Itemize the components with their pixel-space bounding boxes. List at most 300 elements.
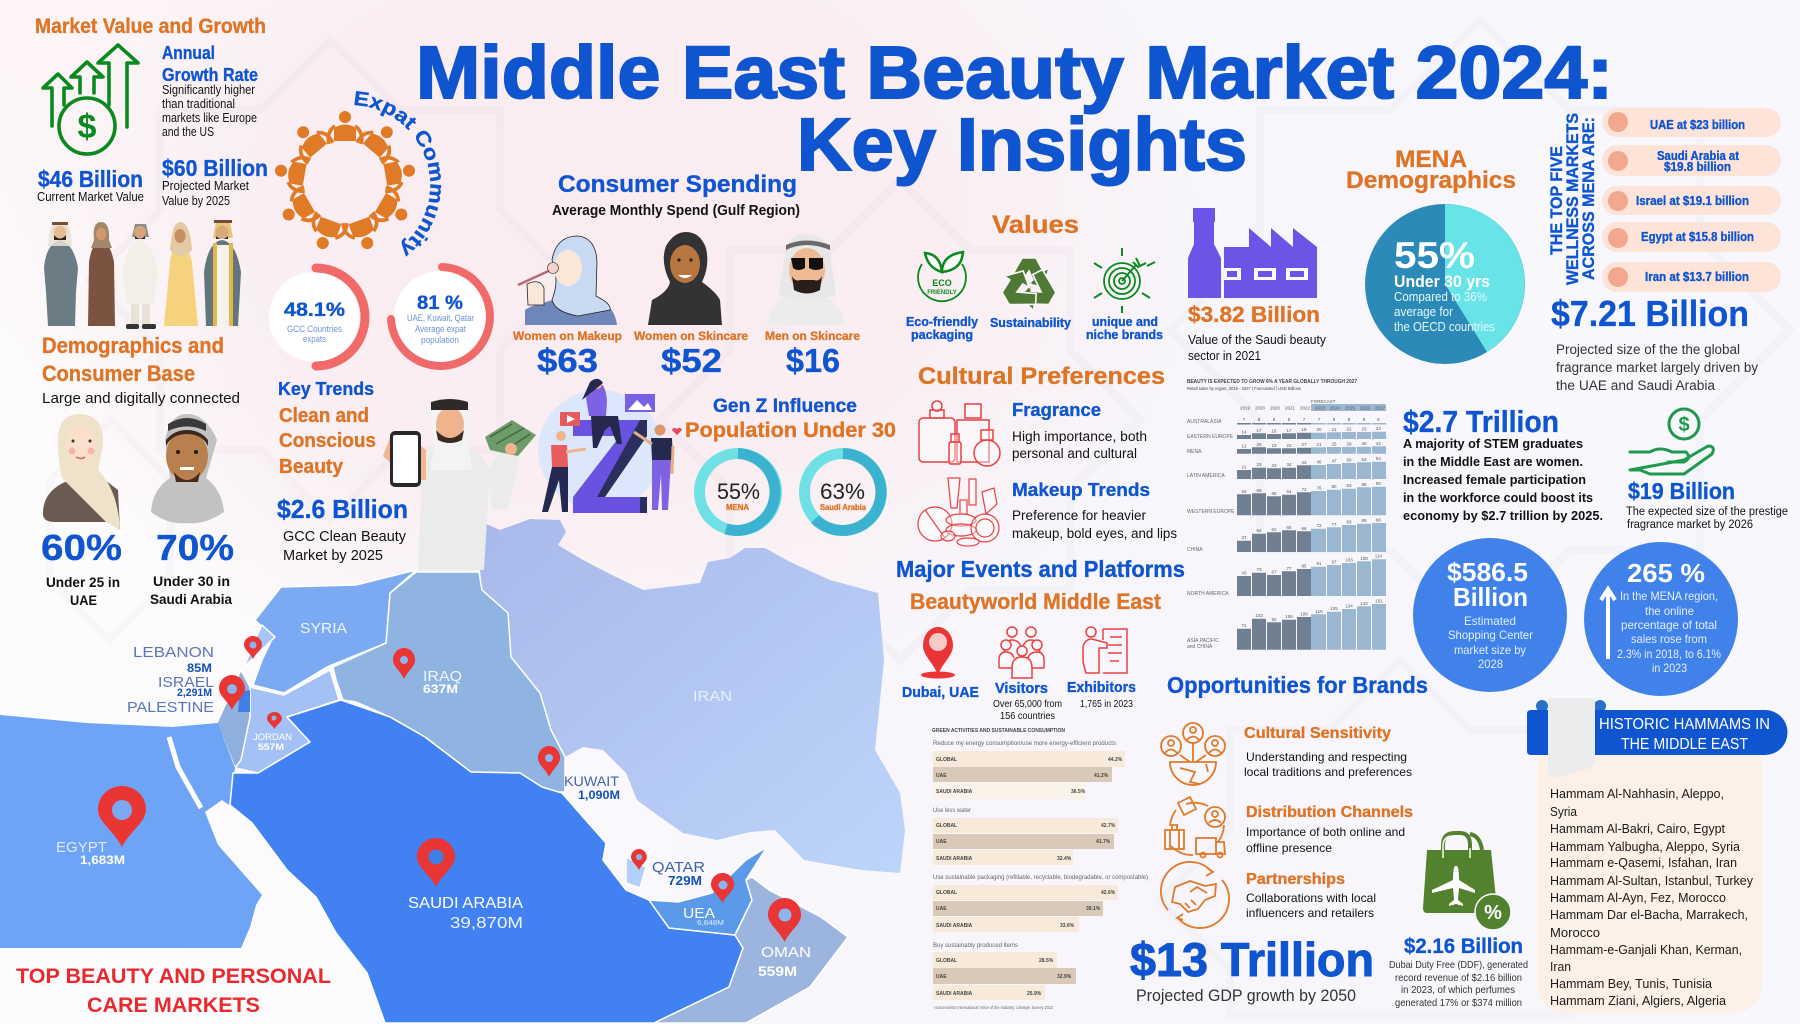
bar values: 77 [1331, 522, 1337, 527]
region labels: LATIN AMERICA [1187, 473, 1225, 479]
stat: projected market value [162, 155, 268, 208]
bar values: 29 [1346, 442, 1352, 446]
icon: duty free shopping bag: % [1484, 902, 1502, 924]
stat: $2.7 trillion STEM: A majority of STEM graduates [1403, 437, 1583, 451]
text: annual growth rate: Annual [162, 43, 215, 63]
country: Egypt [0, 715, 262, 948]
stat: 60% under 25 in UAE [41, 527, 122, 608]
text: distribution channels [1246, 804, 1413, 855]
bar values: 45 [1316, 460, 1322, 464]
bar labels: UAE [936, 773, 947, 779]
stat: Saudi beauty sector [1188, 302, 1327, 363]
circle: shopping center market: Billion [1453, 582, 1528, 612]
pill: Israel: Israel at $19.1 billion [1636, 194, 1749, 208]
title: Middle East Beauty Market 2024: [416, 31, 1613, 114]
bar values: 103 [1345, 558, 1353, 562]
bar values: 116 [1315, 609, 1323, 614]
illustration: woman in black hijab [648, 232, 722, 325]
map labels: 6,848M [697, 920, 724, 927]
region labels: ASIA PACIFIC [1187, 638, 1219, 644]
country: Israel and Palestine [217, 670, 250, 768]
circle: shopping center market: Shopping Center [1448, 628, 1533, 642]
text: annual growth rate: than traditional [162, 97, 235, 111]
country: Iran [477, 519, 905, 873]
stat: women on makeup $63: Women on Makeup [513, 329, 622, 343]
text: event facts: 1,765 in 2023 [1080, 698, 1133, 710]
country: UAE [649, 847, 767, 935]
bar values: 134 [1345, 604, 1353, 608]
circle: online sales 265%: percentage of total [1621, 618, 1717, 632]
icon: hand holding dollar coin: $ [1678, 414, 1690, 436]
bar labels: GLOBAL [936, 823, 957, 829]
bar values: 37 [1241, 535, 1247, 540]
stat: GCC clean beauty market [277, 494, 408, 564]
icon: recycling [996, 258, 1062, 316]
text: event facts: Visitors [995, 680, 1048, 697]
pill: Iran [1602, 262, 1781, 292]
list of hammams: Hammam Bey, Tunis, Tunisia [1550, 976, 1713, 991]
stat: $2.7 trillion STEM: in the Middle East are women. [1403, 455, 1583, 469]
bar labels: GLOBAL [936, 890, 957, 896]
stat: women on makeup $63 [513, 329, 622, 379]
bar values: 21 [1331, 427, 1337, 432]
heading: consumer spending: Average Monthly Spend (Gulf Region) [552, 203, 800, 219]
bar values: 21 [1316, 442, 1322, 447]
pill: Saudi Arabia: $19.8 billion [1664, 160, 1731, 174]
forecast header band: 2020 [1255, 406, 1266, 410]
stat: projected market value: $60 Billion [162, 155, 268, 181]
text: event facts [902, 679, 1136, 722]
text: fragrance [1012, 400, 1147, 461]
map labels: LEBANON [133, 644, 214, 661]
stat: current market value: Current Market Value [37, 190, 144, 204]
list of hammams: Hammam Al-Ayn, Fez, Morocco [1550, 890, 1726, 905]
map labels: UEA [683, 905, 715, 922]
chart title: GREEN ACTIVITIES AND SUSTAINABLE CONSUMPTION [932, 728, 1065, 734]
stat: $2.7 trillion STEM: economy by $2.7 trillion by 2025. [1403, 509, 1603, 523]
forecast header band: 2026 [1360, 406, 1371, 410]
stat: $13 trillion GDP growth: Projected GDP growth by 2050 [1136, 986, 1356, 1005]
text: partnerships: Partnerships [1246, 871, 1345, 888]
bar values: 109 [1300, 612, 1308, 616]
illustration: woman applying makeup [518, 236, 617, 325]
bar values: 33 [1271, 463, 1277, 468]
country: Syria [253, 570, 416, 693]
bar values: 89 [1361, 518, 1367, 523]
stat: current market value: $46 Billion [38, 166, 143, 192]
stat: 60% under 25 in UAE: Under 25 in [46, 575, 120, 590]
bar values: 63 [1241, 489, 1247, 494]
bar labels: 42.6% [1101, 890, 1116, 896]
bar values: 33 [1256, 462, 1262, 467]
group captions: Use less water [933, 808, 971, 814]
bar values: 8 [1333, 417, 1336, 422]
stat: men on skincare $16: Men on Skincare [765, 329, 860, 343]
pie chart: 55% under 30 [1365, 204, 1525, 364]
circle: shopping center market: market size by [1454, 643, 1526, 657]
bar labels: 39.1% [1086, 906, 1101, 912]
heading: key trends: Clean and [279, 405, 369, 427]
text: fragrance: High importance, both [1012, 429, 1147, 444]
icon: cultural sensitivity [1161, 723, 1225, 785]
bar values: 96 [1376, 518, 1381, 522]
text: makeup trends: makeup, bold eyes, and lips [1012, 526, 1177, 541]
text: annual growth rate [162, 43, 258, 139]
text: annual growth rate: Growth Rate [162, 65, 258, 85]
text: partnerships: Collaborations with local [1246, 891, 1376, 905]
pie chart: 55% under 30: average for [1394, 305, 1453, 319]
stat: $2.7 trillion STEM [1403, 404, 1603, 523]
text: annual growth rate: Significantly higher [162, 83, 255, 97]
region labels: and CHINA [1187, 644, 1213, 650]
pill: Egypt: Egypt at $15.8 billion [1641, 230, 1754, 244]
bar values: 17 [1256, 428, 1262, 433]
bar labels: SAUDI ARABIA [936, 923, 973, 929]
text: cultural sensitivity: local traditions and preferences [1244, 765, 1412, 779]
map labels: 85M [187, 661, 212, 675]
stat: prestige fragrance market: The expected size of the prestige [1626, 506, 1788, 518]
bar values: 90 [1376, 481, 1381, 486]
bar values: 65 [1271, 491, 1277, 496]
pill: UAE [1602, 108, 1781, 137]
forecast bars [1311, 423, 1386, 650]
stat: global fragrance market: the UAE and Saudi Arabia [1556, 378, 1715, 393]
bar values: 47 [1331, 458, 1337, 464]
heading: key trends: Key Trends [278, 379, 374, 399]
rotated heading: top five wellness markets: WELLNESS MARKETS [1564, 113, 1582, 285]
map labels: QATAR [652, 859, 705, 876]
forecast header band: 2027 [1375, 406, 1386, 410]
heading: Gen Z influence: Gen Z Influence [713, 396, 857, 417]
region labels: WESTERN EUROPE [1187, 509, 1235, 515]
list of hammams: Hammam Dar el-Bacha, Marrakech, [1550, 907, 1748, 922]
forecast header band: 2023 [1315, 406, 1326, 410]
heading: opportunities for brands: Opportunities for Brands [1167, 672, 1428, 698]
stat: 70% under 30 in Saudi Arabia: Saudi Arabia [150, 592, 232, 607]
donut: 81% UAE Kuwait Qatar expat population: population [421, 335, 459, 345]
stat: men on skincare $16: $16 [786, 342, 840, 379]
map labels: 557M [258, 742, 284, 752]
bar labels: 36.5% [1071, 789, 1086, 795]
map: Middle East top markets [0, 519, 905, 1023]
circle: shopping center market: 2028 [1478, 657, 1503, 671]
region labels: MENA [1187, 449, 1202, 455]
bar values: 20 [1256, 442, 1262, 447]
banner [1527, 698, 1788, 778]
heading: key trends [278, 379, 376, 478]
bar values: 83 [1346, 520, 1352, 524]
icon: eco friendly [918, 252, 966, 301]
map labels: KUWAIT [564, 773, 619, 789]
stat: global fragrance market: $7.21 Billion [1551, 293, 1749, 334]
icon: partnership handshake [1161, 862, 1229, 928]
bar values: 43 [1301, 460, 1307, 465]
list of hammams: Hammam-e-Ganjali Khan, Kerman, [1550, 942, 1742, 957]
bar labels: 44.2% [1108, 757, 1123, 763]
bar labels: SAUDI ARABIA [936, 991, 973, 997]
bar values: 27 [1301, 442, 1307, 447]
donut: 63% Saudi Arabia: 63% [820, 479, 865, 504]
country: Qatar [626, 857, 646, 888]
banner: HISTORIC HAMMAMS IN [1599, 716, 1770, 733]
bar values: 8 [1348, 417, 1351, 422]
circle: shopping center market: $586.5 [1447, 557, 1528, 587]
donut: 48.1% GCC countries expats: GCC Countries [287, 324, 342, 335]
bar values: 103 [1255, 613, 1263, 618]
pill: Saudi Arabia: Saudi Arabia at [1657, 149, 1740, 163]
stat: women on skincare $52: $52 [661, 342, 722, 379]
text: value labels [906, 314, 1163, 342]
bar labels: 33.6% [1060, 923, 1075, 929]
map labels: OMAN [761, 944, 811, 961]
bar labels: 32.4% [1057, 856, 1072, 862]
stat: 70% under 30 in Saudi Arabia: 70% [156, 527, 234, 568]
region labels: AUSTRALASIA [1187, 419, 1222, 425]
bar labels: 42.7% [1101, 823, 1116, 829]
pill: Saudi Arabia [1602, 145, 1781, 176]
bar values: 71 [1241, 623, 1247, 628]
pie chart: 55% under 30: 55% [1394, 235, 1475, 276]
bar values: 19 [1301, 427, 1307, 432]
bar values: 19 [1271, 443, 1277, 448]
country: Oman [654, 877, 848, 1023]
pie chart: 55% under 30: Under 30 yrs [1394, 273, 1490, 291]
text: annual growth rate: markets like Europe [162, 111, 257, 125]
heading: MENA demographics: MENA [1395, 146, 1467, 173]
text: makeup trends: Makeup Trends [1012, 480, 1150, 500]
stat: $2.7 trillion STEM: in the workforce could boost its [1403, 491, 1593, 505]
text: digitally connected: Large and digitally connected [42, 390, 240, 407]
circle: online sales 265%: the online [1645, 604, 1694, 618]
bar values: 14 [1241, 430, 1247, 434]
map labels: PALESTINE [127, 699, 214, 716]
bar labels: GLOBAL [936, 757, 957, 763]
heading: major events and platforms: Major Events and Platforms [896, 556, 1185, 582]
circle: shopping center market: Estimated [1464, 614, 1516, 628]
heading: cultural preferences: Cultural Preferences [918, 363, 1165, 390]
bar values: 23 [1361, 426, 1367, 432]
group captions [933, 741, 1148, 1010]
stat: 60% under 25 in UAE: 60% [41, 527, 122, 568]
stat: 60% under 25 in UAE: UAE [70, 593, 97, 608]
bar values: 97 [1331, 560, 1337, 564]
text: value labels: Sustainability [990, 315, 1072, 330]
bar values: 20 [1316, 427, 1322, 432]
stat: $13 trillion GDP growth: $13 Trillion [1130, 933, 1374, 986]
stat: Dubai Duty Free: in 2023, of which perfumes [1401, 984, 1515, 996]
country: Lebanon [244, 625, 275, 667]
donut: 81% UAE Kuwait Qatar expat population: UAE, Kuwait, Qatar [407, 313, 474, 323]
text: value labels: packaging [911, 327, 973, 342]
heading: market value and growth: Market Value and Growth [35, 15, 266, 38]
icon: exhibitor with board [1083, 627, 1127, 673]
list of hammams: Syria [1550, 804, 1578, 819]
bar labels: 41.7% [1096, 839, 1111, 845]
bar values: 125 [1330, 606, 1338, 611]
forecast header band: 2021 [1285, 406, 1296, 410]
bar values: 62 [1271, 527, 1277, 532]
bar labels: 41.2% [1094, 773, 1109, 779]
bar values: 65 [1286, 525, 1292, 530]
gulf of Suez [169, 737, 201, 808]
bar values: 42 [1376, 441, 1381, 446]
pill: Israel [1602, 186, 1781, 215]
heading: consumer spending [552, 171, 800, 219]
map labels: 1,683M [80, 853, 125, 867]
stat: Dubai Duty Free: generated 17% or $374 million [1395, 997, 1522, 1009]
stat: Dubai Duty Free: record revenue of $2.16 billion [1395, 972, 1522, 984]
heading: demographics and consumer base: Consumer Base [42, 361, 195, 386]
stat: prestige fragrance market: fragrance market by 2026 [1627, 519, 1753, 531]
icon: eco friendly: ECO [932, 278, 952, 288]
group captions: - Euromonitor International Voice of the Industry: Lifestyle Survey 2022 [933, 1005, 1053, 1010]
bar values: 43 [1241, 570, 1247, 576]
illustration: man with sunglasses [767, 234, 845, 325]
rotated heading: top five wellness markets [1548, 113, 1598, 285]
region labels [1187, 419, 1235, 650]
donut: 81% UAE Kuwait Qatar expat population [391, 267, 490, 366]
stat: Saudi beauty sector: Value of the Saudi beauty [1188, 333, 1327, 347]
bar labels: GLOBAL [936, 958, 957, 964]
map labels: 559M [758, 963, 797, 979]
bar values: 69 [1256, 488, 1262, 493]
map labels: 39,870M [450, 915, 523, 932]
circle: online sales 265% [1584, 542, 1738, 696]
stat: global fragrance market: Projected size of the the global [1556, 342, 1740, 357]
illustration: Gen Z group around purple Z [538, 379, 682, 513]
region labels: EASTERN EUROPE [1187, 434, 1234, 440]
bar labels: 25.9% [1027, 991, 1042, 997]
bar values: 50 [1346, 458, 1352, 462]
heading: Gen Z influence [685, 396, 896, 442]
text: event facts: Dubai, UAE [902, 684, 979, 701]
stat: GCC clean beauty market: GCC Clean Beauty [283, 529, 407, 545]
illustration: man in grey ghutra [151, 414, 224, 523]
heading: values: Values [992, 211, 1079, 239]
bar values: 92 [1271, 617, 1277, 622]
forecast header band: 2020 [1270, 406, 1281, 410]
bar values: 24 [1376, 426, 1381, 431]
illustration: five people in traditional dress [44, 220, 241, 329]
bar values: 8 [1288, 417, 1291, 422]
bar values: 13 [1241, 444, 1247, 448]
map title [16, 965, 331, 1017]
bar values: 7 [1243, 417, 1246, 422]
text: distribution channels: offline presence [1246, 841, 1332, 855]
illustration: woman in cream hijab [43, 414, 120, 530]
icon: fragrance bottles [919, 401, 1000, 466]
stat: Saudi beauty sector: sector in 2021 [1188, 349, 1261, 363]
stat: Dubai Duty Free: $2.16 Billion [1404, 935, 1523, 958]
bar labels: 32.9% [1057, 974, 1072, 980]
title [416, 31, 1613, 186]
bar values: 7 [1303, 417, 1306, 422]
text: value labels: niche brands [1086, 327, 1163, 342]
bar labels: UAE [936, 974, 947, 980]
heading: key trends: Beauty [279, 456, 344, 478]
map labels: SAUDI ARABIA [408, 895, 524, 912]
circle: online sales 265%: sales rose from [1631, 632, 1707, 646]
bar values: 72 [1301, 487, 1307, 492]
bar values: 8 [1273, 417, 1276, 422]
bar values: 83 [1346, 483, 1352, 488]
stat: Dubai Duty Free [1389, 935, 1528, 1009]
icon: makeup products [918, 478, 999, 546]
icon: growth arrows with dollar coin [43, 45, 138, 154]
map labels: IRAQ [423, 668, 462, 685]
bar chart: green activities and sustainable consumption [932, 728, 1148, 1010]
icon: visitors group [999, 627, 1044, 678]
group captions: Buy sustainably produced items [933, 943, 1018, 949]
heading: major events and platforms [896, 556, 1185, 614]
stat: current market value [37, 166, 144, 204]
pie chart: 55% under 30: Compared to 36% [1394, 290, 1487, 304]
banner: THE MIDDLE EAST [1621, 736, 1748, 753]
donut: 55% MENA: MENA [726, 502, 749, 512]
country: Saudi Arabia [230, 700, 743, 1023]
map labels: SYRIA [300, 620, 347, 637]
pill: Egypt [1602, 222, 1781, 252]
list of hammams: Hammam Yalbugha, Aleppo, Syria [1550, 839, 1741, 854]
map labels: ISRAEL [158, 674, 214, 691]
pie chart: 55% under 30: the OECD countries [1394, 320, 1495, 334]
rotated heading: top five wellness markets: ACROSS MENA ARE: [1580, 117, 1598, 280]
text: event facts: Over 65,000 from [993, 698, 1062, 710]
group captions: Use sustainable packaging (refillable, recyclable, biodegradable, or compostable) [933, 875, 1148, 881]
bar labels: UAE [936, 839, 947, 845]
illustration: man with phone and money [383, 399, 536, 570]
stat: $2.7 trillion STEM: $2.7 Trillion [1403, 404, 1559, 439]
bar values: 80 [1331, 484, 1337, 489]
map labels [56, 620, 811, 979]
heading: major events and platforms: Beautyworld Middle East [910, 589, 1162, 614]
stat: women on skincare $52 [634, 329, 748, 379]
map labels: JORDAN [253, 732, 292, 743]
list: top five wellness markets pills [1602, 108, 1781, 292]
text: annual growth rate: and the US [162, 125, 214, 139]
bar labels: UAE [936, 906, 947, 912]
text: partnerships: influencers and retailers [1246, 906, 1374, 920]
icon: eco friendly: FRIENDLY [927, 290, 957, 296]
heading: demographics and consumer base: Demographics and [42, 333, 224, 358]
forecast header band [1240, 399, 1386, 411]
group captions: Reduce my energy consumption/use more energy-efficient products [933, 741, 1116, 747]
list of hammams: Hammam Al-Bakri, Cairo, Egypt [1550, 821, 1725, 836]
circle: shopping center market [1413, 538, 1567, 692]
bars [933, 751, 1125, 1000]
stat: Dubai Duty Free: Dubai Duty Free (DDF), generated [1389, 959, 1528, 971]
text: cultural sensitivity [1244, 725, 1412, 779]
stat: global fragrance market: fragrance market largely driven by [1556, 360, 1758, 375]
text: event facts: Exhibitors [1067, 679, 1136, 696]
map labels: 637M [423, 682, 458, 696]
bar values: 40 [1361, 441, 1367, 446]
list of hammams [1550, 786, 1753, 1008]
stat: global fragrance market [1551, 293, 1758, 393]
text: value labels: unique and [1092, 314, 1158, 329]
donut: 48.1% GCC countries expats: 48.1% [284, 300, 345, 321]
bar values: 52 [1361, 457, 1367, 462]
icon: duty free shopping bag [1423, 833, 1511, 930]
heading: MENA demographics: Demographics [1346, 167, 1516, 194]
stat: 70% under 30 in Saudi Arabia: Under 30 in [153, 574, 230, 589]
map title: TOP BEAUTY AND PERSONAL [16, 965, 331, 988]
pill: Iran: Iran at $13.7 billion [1645, 270, 1749, 284]
heading: Gen Z influence: Population Under 30 [685, 418, 896, 442]
icon: purple factory [1188, 208, 1317, 298]
map labels: IRAN [693, 688, 732, 705]
country: Jordan [235, 670, 339, 773]
